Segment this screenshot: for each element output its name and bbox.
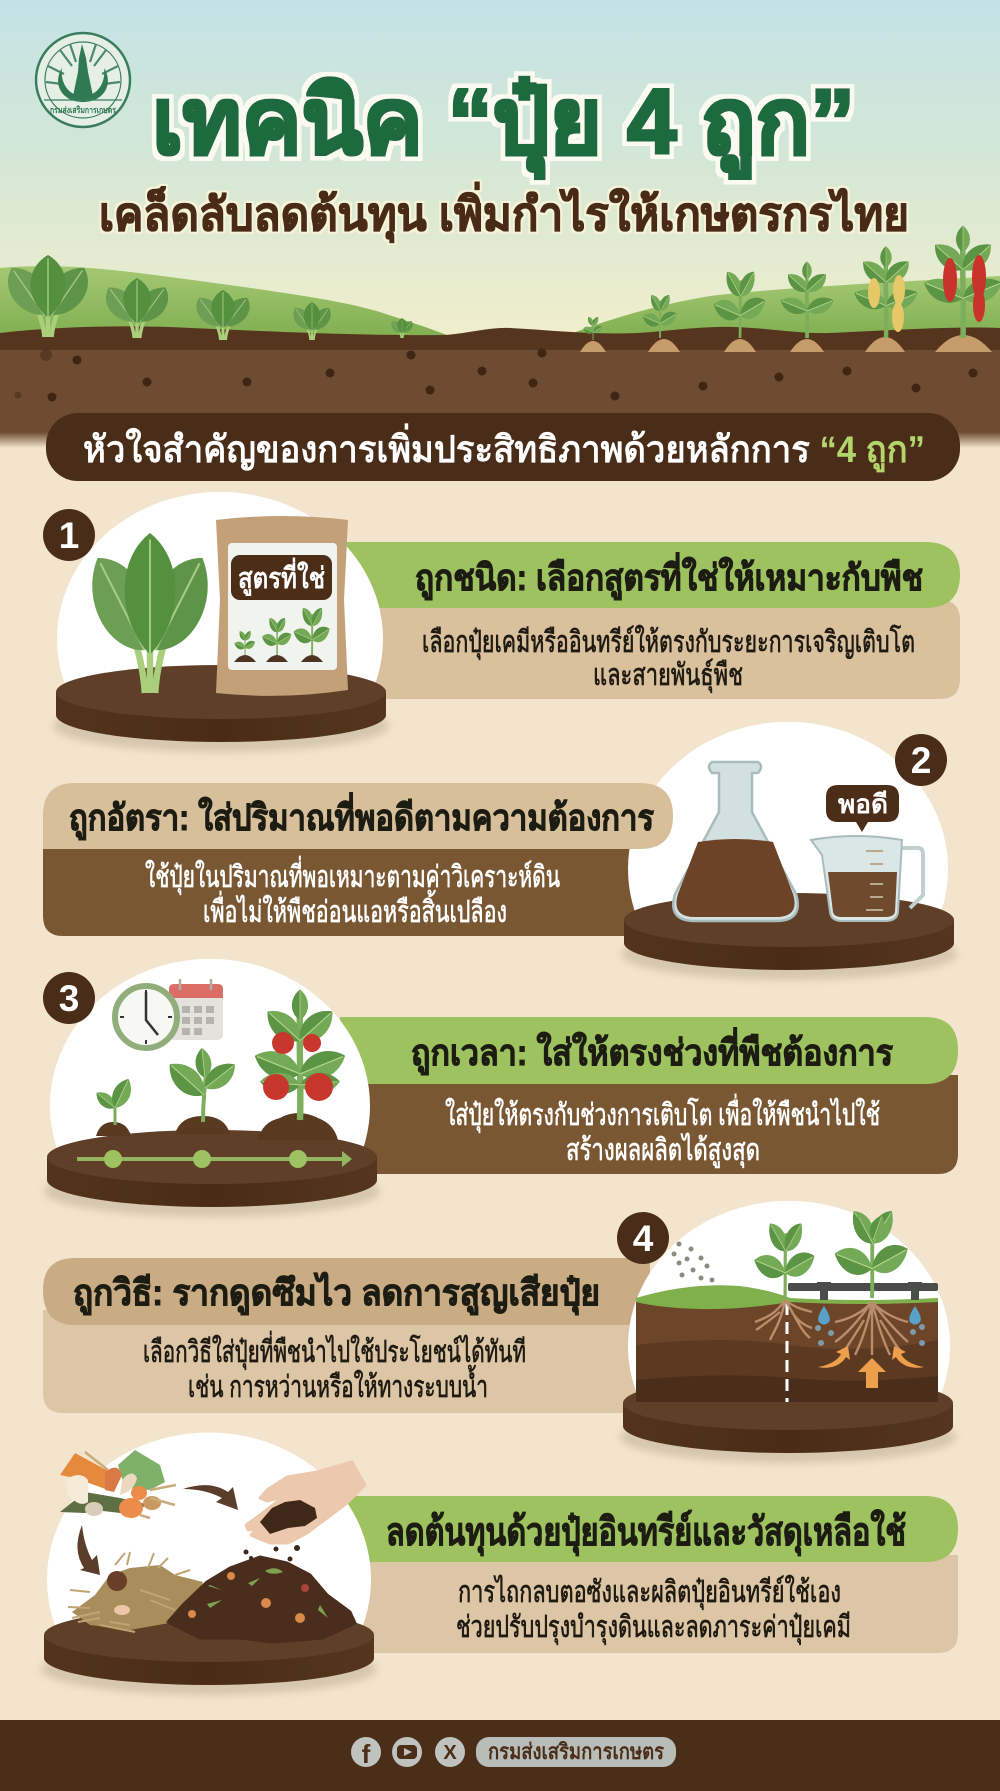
number badge 2 [895, 734, 947, 786]
number badge 3: 3 [59, 978, 79, 1019]
panel: step 1 right type [43, 492, 960, 752]
step 1 body: และสายพันธุ์พืช [593, 658, 743, 694]
icon: water drops [815, 1306, 925, 1346]
icon: X [435, 1737, 465, 1767]
step 4 body [143, 1331, 526, 1404]
icon: fertilizer granules [672, 1242, 714, 1282]
footer pill: กรมส่งเสริมการเกษตร [488, 1739, 664, 1764]
soil layers [0, 326, 1000, 448]
step 3 body [445, 1094, 880, 1169]
tomato plant [250, 989, 350, 1120]
panel: step 4 right method [43, 1201, 956, 1463]
platform [621, 893, 957, 980]
icon: facebook: f [362, 1739, 371, 1769]
seedling [93, 1075, 136, 1125]
icon: plants with roots [752, 1205, 912, 1355]
platform with timeline [44, 1130, 380, 1217]
number badge 1: 1 [59, 515, 79, 556]
section banner [46, 413, 960, 481]
crops: leafy greens growth row [0, 255, 415, 340]
organic body [456, 1574, 851, 1646]
platform [41, 1608, 377, 1695]
logo: department seal [36, 33, 130, 127]
step 4 body: เลือกวิธีใส่ปุ๋ยที่พืชนำไปใช้ประโยชน์ได้ทันที [143, 1331, 526, 1371]
platform [620, 1376, 956, 1463]
icon: youtube [392, 1737, 422, 1767]
step 2 body panel [43, 840, 660, 936]
bag tag text: สูตรที่ใช่ [238, 557, 325, 596]
speech bubble: พอดี [838, 789, 888, 819]
bag tag [231, 555, 332, 600]
icon: finished compost pile [168, 1545, 355, 1642]
platform [53, 665, 389, 752]
white circle backdrop [628, 1201, 950, 1403]
step 4 text panels [43, 1258, 650, 1413]
step 4 body: เช่น การหว่านหรือให้ทางระบบน้ำ [188, 1365, 488, 1404]
footer bar [0, 1720, 1000, 1791]
icon: straw pile [68, 1552, 203, 1632]
logo: department seal: กรมส่งเสริมการเกษตร [50, 105, 116, 115]
panel: step 2 right rate [43, 722, 957, 980]
icon: fertilizer bag [216, 516, 348, 696]
step 2 body [145, 856, 560, 929]
white circle backdrop [50, 959, 370, 1157]
icon: clock [115, 986, 177, 1048]
icon: flask [673, 762, 798, 921]
number badge 3 [43, 972, 95, 1024]
number badge 4: 4 [633, 1218, 654, 1259]
icon: hand holding compost [246, 1462, 365, 1543]
soil pebbles [14, 348, 978, 402]
step 3 heading: ถูกเวลา: ใส่ให้ตรงช่วงที่พืชต้องการ [411, 1027, 894, 1076]
subtitle: เคล็ดลับลดต้นทุน เพิ่มกำไรให้เกษตรกรไทย [99, 182, 909, 243]
banner text: หัวใจสำคัญของการเพิ่มประสิทธิภาพด้วยหลักการ “4 ถูก” [83, 423, 925, 473]
speech bubble [826, 785, 899, 832]
young plant [162, 1047, 241, 1122]
farm landscape: hills, soil and crops [0, 226, 1000, 448]
step 1 text panels [340, 542, 960, 699]
step 4 heading: ถูกวิธี: รากดูดซึมไว ลดการสูญเสียปุ๋ย [73, 1271, 600, 1316]
step 2 body: เพื่อไม่ให้พืชอ่อนแอหรือสิ้นเปลือง [203, 890, 507, 929]
white circle backdrop [47, 1432, 371, 1635]
icon: calendar [169, 979, 223, 1040]
panel: reduce cost with organic fertilizer [41, 1432, 958, 1695]
step 1 body [422, 624, 915, 694]
icon: X: X [443, 1742, 457, 1764]
icon: measuring jug [811, 836, 923, 921]
arrow: scraps to hand [183, 1485, 238, 1510]
hill: left [0, 266, 460, 340]
title: เทคนิค “ปุ๋ย 4 ถูก” [152, 71, 855, 179]
step 2 heading: ถูกอัตรา: ใส่ปริมาณที่พอดีตามความต้องการ [69, 792, 655, 841]
number badge 2: 2 [911, 740, 931, 781]
step 3 body: สร้างผลผลิตได้สูงสุด [566, 1132, 760, 1169]
step 1 heading: ถูกชนิด: เลือกสูตรที่ใช่ให้เหมาะกับพืช [415, 552, 923, 601]
step 3 text panels [340, 1017, 958, 1174]
step 2 body: ใช้ปุ๋ยในปริมาณที่พอเหมาะตามค่าวิเคราะห์ดิน [145, 856, 560, 896]
soil cross-section [636, 1285, 938, 1402]
icon: growth stage plants [93, 989, 350, 1140]
icon: food scraps [60, 1450, 176, 1518]
step 2 header pill [43, 783, 673, 849]
soil mounds under right crops [580, 335, 992, 352]
icon: facebook [351, 1737, 381, 1769]
icon: upward orange arrows [818, 1346, 924, 1388]
organic body: การไถกลบตอซังและผลิตปุ๋ยอินทรีย์ใช้เอง [458, 1574, 841, 1611]
organic body: ช่วยปรับปรุงบำรุงดินและลดภาระค่าปุ๋ยเคมี [456, 1611, 851, 1646]
number badge 1 [43, 509, 95, 561]
number badge 4 [617, 1212, 669, 1264]
white circle backdrop [628, 722, 948, 920]
organic text panels [340, 1496, 958, 1653]
crops: pepper growth row [583, 226, 1000, 340]
icon: drip pipe [788, 1282, 938, 1300]
white circle backdrop [57, 492, 383, 692]
hill: right [555, 276, 1000, 340]
panel: step 3 right time [43, 959, 958, 1217]
sky gradient [0, 0, 1000, 340]
icon: spinach [77, 533, 223, 693]
arrow: scraps to pile [77, 1525, 100, 1575]
